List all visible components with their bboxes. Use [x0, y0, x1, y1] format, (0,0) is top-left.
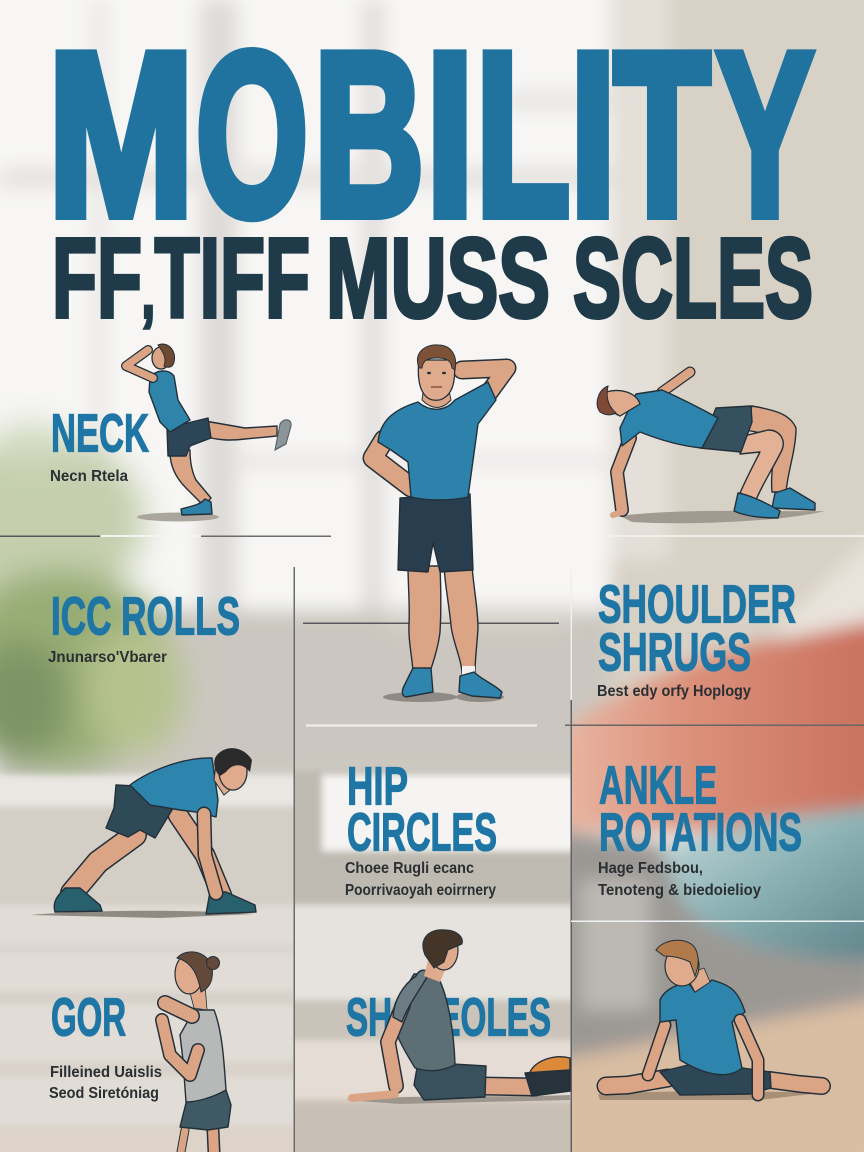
figure: woman neck stretch: [162, 952, 231, 1152]
section: gor: Filleined Uaislis: [50, 1064, 162, 1081]
section: neck: NECK: [51, 404, 149, 464]
section: shoulder shrugs: Best edy orfy Hoplogy: [597, 683, 751, 700]
title: I: [426, 6, 474, 264]
section: hip circles: Poorrivaoyah eoirrnery: [345, 882, 496, 899]
section: shoulder shrugs: SHRUGS: [598, 622, 751, 682]
section: hip circles: CIRCLES: [347, 802, 497, 862]
plant: [0, 423, 185, 770]
subtitle: [52, 215, 813, 341]
divider lines: [0, 535, 864, 1152]
subtitle: FF,TIFF: [52, 215, 310, 341]
figure: seated blue shirt: [598, 940, 828, 1100]
section: neck: [50, 404, 149, 485]
section: sheoles: SHSHEOLES: [346, 988, 551, 1048]
section: ankle rotations: Tenoteng & biedoielioy: [598, 882, 761, 899]
figure: standing leg swing: [126, 344, 291, 522]
section: hip circles: Choee Rugli ecanc: [345, 860, 474, 877]
section: hip circles: [345, 756, 497, 899]
section: ankle rotations: ANKLE: [599, 756, 717, 816]
title: M: [48, 6, 194, 264]
section: ankle rotations: [598, 756, 802, 899]
section: neck: Necn Rtela: [50, 468, 128, 485]
section: ankle rotations: Hage Fedsbou,: [598, 860, 703, 877]
figure: back bridge: [597, 372, 825, 523]
figure: main standing man: [373, 345, 507, 702]
title: O: [196, 6, 308, 264]
section: gor: [49, 988, 162, 1102]
section: icc rolls: [48, 586, 240, 666]
subtitle: MUSS: [326, 215, 550, 341]
figure: seated gray shirt: [345, 930, 570, 1104]
title: T: [614, 6, 710, 264]
title: B: [314, 6, 424, 264]
section: icc rolls: Jnunarso'Vbarer: [48, 649, 167, 666]
title: I: [570, 6, 616, 264]
section: gor: Seod Siretóniag: [49, 1085, 159, 1102]
section: shoulder shrugs: [597, 574, 796, 700]
section: hip circles: HIP: [347, 756, 408, 816]
section: gor: GOR: [51, 988, 126, 1048]
title: L: [476, 6, 570, 264]
figure: forward bend: [30, 748, 256, 918]
section: icc rolls: ICC ROLLS: [51, 586, 240, 646]
title: [48, 6, 813, 264]
